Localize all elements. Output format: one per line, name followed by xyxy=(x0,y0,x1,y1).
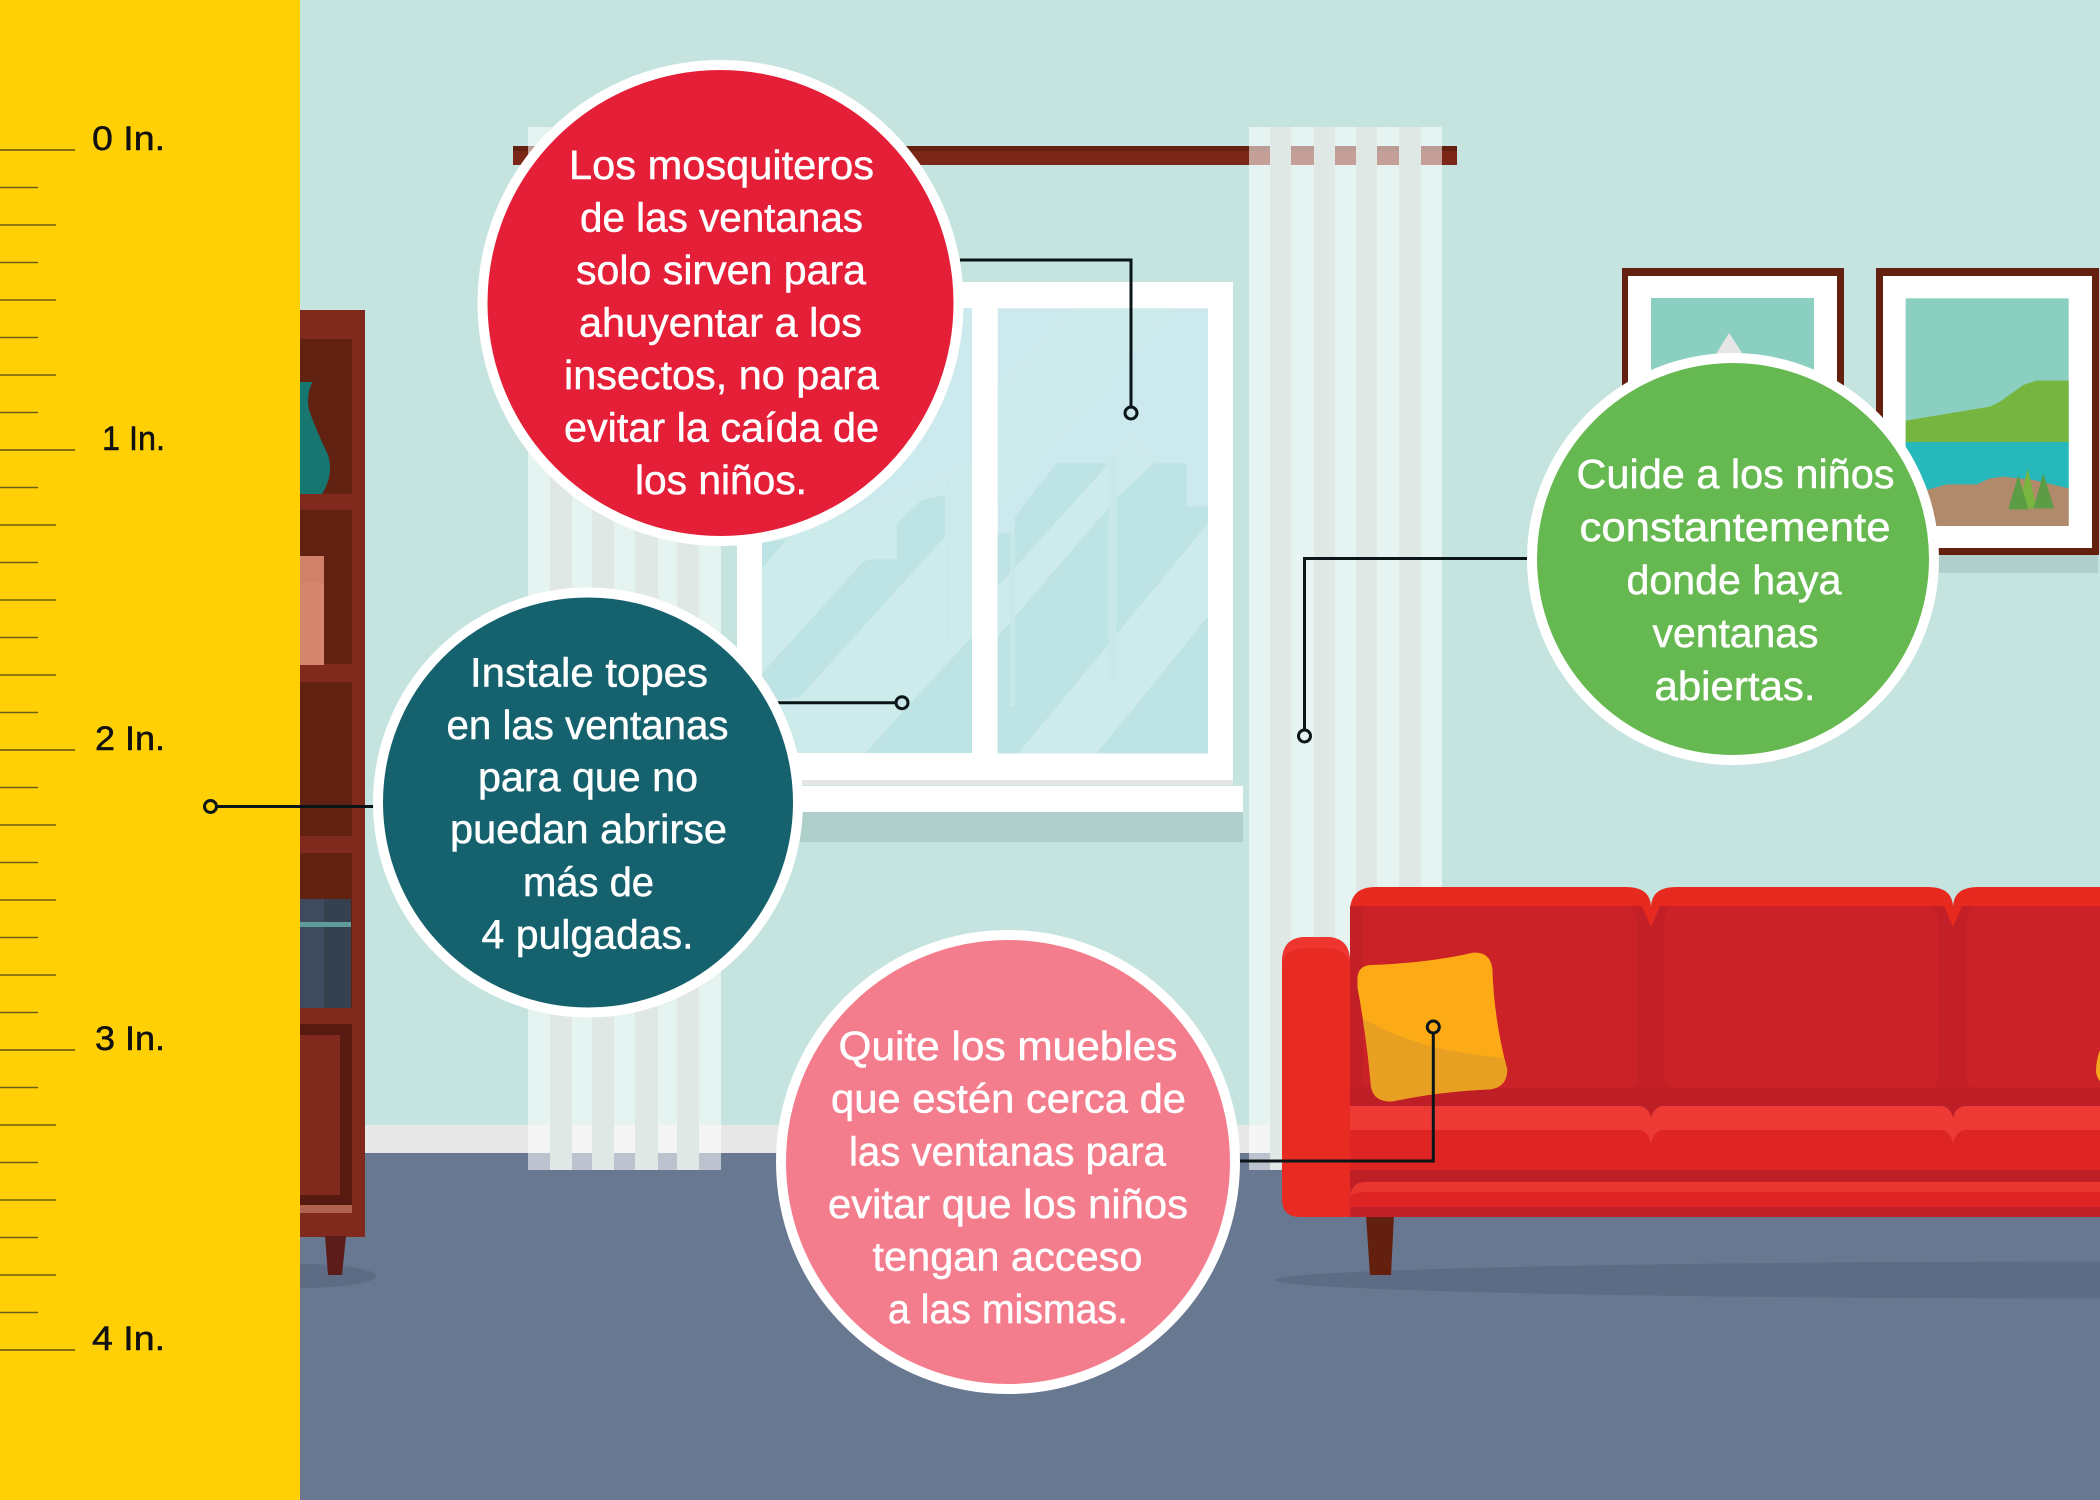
back cushions xyxy=(1350,887,2100,1106)
pink callout text xyxy=(828,1023,1188,1332)
short ticks xyxy=(0,188,38,1312)
bookcase leg xyxy=(325,1236,346,1275)
major ticks xyxy=(0,150,75,1350)
picture: landscape xyxy=(1876,268,2099,555)
second pillow edge xyxy=(2096,1050,2100,1081)
picture shadow xyxy=(1876,555,2098,573)
label 0 In.: 0 In. xyxy=(92,120,165,158)
connector: teal callout to ruler xyxy=(204,800,375,812)
teal callout text: puedan abrirse xyxy=(450,806,727,852)
red callout text: ahuyentar a los xyxy=(579,300,862,346)
callout: green xyxy=(1532,358,1934,760)
right pane xyxy=(998,308,1208,753)
teal callout text: para que no xyxy=(478,754,698,800)
sofa shadow xyxy=(1275,1262,2100,1298)
pink callout text: tengan acceso xyxy=(872,1234,1142,1280)
ruler xyxy=(0,0,300,1500)
red callout text: insectos, no para xyxy=(564,352,879,398)
right curtain xyxy=(1249,127,1442,1170)
callout: pink xyxy=(781,935,1235,1389)
green callout text: abiertas. xyxy=(1654,663,1816,709)
label 3 In.: 3 In. xyxy=(95,1020,165,1058)
baseboard xyxy=(300,1125,1400,1153)
picture: mountain xyxy=(1622,268,1844,555)
bookcase xyxy=(300,310,365,1275)
vase xyxy=(300,382,330,494)
green callout text xyxy=(1576,451,1894,709)
pink callout text: las ventanas para xyxy=(849,1128,1166,1174)
left curtain xyxy=(528,127,721,1170)
pink callout text: a las mismas. xyxy=(888,1286,1128,1332)
green callout text: donde haya xyxy=(1626,557,1842,603)
wall background xyxy=(0,0,2100,1153)
floor xyxy=(0,1153,2100,1500)
blue books xyxy=(300,899,351,1008)
teal callout text xyxy=(446,650,728,958)
red callout text: de las ventanas xyxy=(580,194,863,240)
teal callout text: en las ventanas xyxy=(446,702,728,748)
teal callout text: más de xyxy=(523,859,654,905)
green callout text: constantemente xyxy=(1580,504,1890,550)
red callout text: solo sirven para xyxy=(576,247,866,293)
pink callout text: que estén cerca de xyxy=(831,1076,1186,1122)
seat cushions xyxy=(1350,1106,2100,1217)
connector: teal callout to window xyxy=(776,697,908,709)
green callout text: Cuide a los niños xyxy=(1576,451,1894,497)
pink callout text: Quite los muebles xyxy=(838,1023,1178,1069)
curtain rod xyxy=(513,146,1457,165)
label 1 In.: 1 In. xyxy=(102,420,165,458)
connector: green callout to curtain xyxy=(1298,558,1530,742)
sofa arm xyxy=(1282,937,1350,1217)
red callout text: Los mosquiteros xyxy=(569,142,874,188)
label 2 In.: 2 In. xyxy=(95,720,165,758)
callout: teal xyxy=(378,592,798,1012)
window sill xyxy=(727,786,1243,812)
green callout text: ventanas xyxy=(1652,610,1818,656)
teal callout text: 4 pulgadas. xyxy=(482,912,694,958)
left pane xyxy=(762,308,972,753)
label 4 In.: 4 In. xyxy=(92,1320,165,1358)
window xyxy=(727,282,1243,842)
red callout text: los niños. xyxy=(635,457,807,503)
connector: red callout to window screen xyxy=(960,260,1137,419)
yellow pillow xyxy=(1357,952,1508,1102)
window sill shadow xyxy=(727,812,1243,842)
sofa leg xyxy=(1366,1215,1394,1275)
connector: pink callout to pillow xyxy=(1238,1021,1439,1161)
red callout text xyxy=(564,142,879,503)
red callout text: evitar la caída de xyxy=(564,404,879,450)
sofa xyxy=(1282,887,2100,1275)
bookcase shadow xyxy=(224,1264,376,1288)
medium ticks xyxy=(0,225,56,1275)
pink callout text: evitar que los niños xyxy=(828,1181,1188,1227)
pink books xyxy=(300,556,324,665)
teal callout text: Instale topes xyxy=(470,650,708,696)
window frame xyxy=(737,282,1233,781)
callout: red xyxy=(482,65,958,541)
